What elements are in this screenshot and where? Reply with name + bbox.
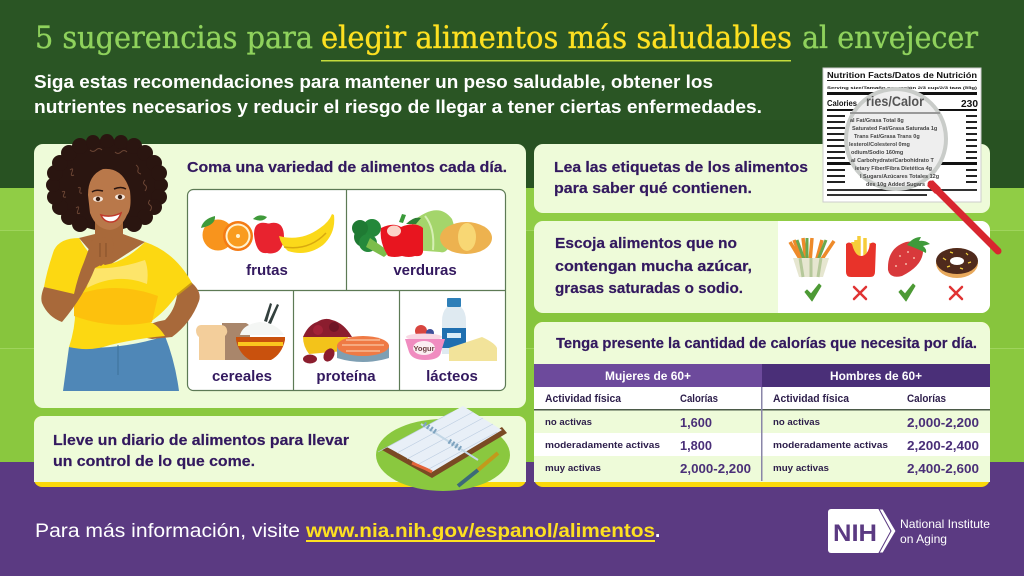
footer text: . bbox=[655, 521, 660, 542]
nutrition label: 230 bbox=[961, 99, 978, 110]
panel: food diary bbox=[34, 406, 526, 491]
panel: choose foods bbox=[534, 221, 990, 313]
magnifier lens: Saturated Fat/Grasa Saturada 1g bbox=[852, 126, 937, 132]
table body: Actividad física bbox=[773, 393, 850, 405]
table body: no activas bbox=[545, 417, 592, 428]
diary text: un control de lo que come. bbox=[53, 453, 255, 470]
icon: vegetables bbox=[352, 210, 492, 257]
right arm bbox=[138, 283, 200, 339]
magnifier lens: des 10g Added Sugars bbox=[866, 182, 925, 188]
label: cereales: cereales bbox=[212, 368, 272, 385]
table body: 2,000-2,200 bbox=[907, 416, 979, 430]
table body bbox=[534, 387, 990, 481]
food grid bbox=[188, 190, 506, 390]
icon: cross bbox=[854, 287, 866, 299]
magnifier lens: Trans Fat/Grasa Trans 0g bbox=[854, 134, 920, 140]
icon: fries bbox=[846, 236, 876, 277]
title bbox=[35, 20, 978, 62]
logo: NIH National Institute on Aging: on Aging bbox=[900, 532, 947, 546]
table body: 2,400-2,600 bbox=[907, 462, 979, 476]
table header: Mujeres de 60+ bbox=[605, 369, 691, 383]
illustration: woman bbox=[41, 134, 200, 391]
table body: 2,000-2,200 bbox=[680, 462, 751, 476]
magnifier lens: al Carbohydrate/Carbohidrato T bbox=[851, 158, 934, 164]
choose text: Escoja alimentos que no bbox=[555, 235, 737, 252]
icon: notebook and pen bbox=[376, 406, 510, 491]
label: verduras: verduras bbox=[393, 262, 457, 279]
panel: read labels bbox=[534, 144, 990, 213]
diary text bbox=[53, 432, 349, 470]
heading: calories: Tenga presente la cantidad de calorías que necesita por día. bbox=[556, 335, 977, 352]
left arm bbox=[41, 240, 114, 322]
intro text bbox=[34, 71, 762, 117]
labels text: Lea las etiquetas de los alimentos bbox=[554, 159, 808, 176]
title: 5 sugerencias para bbox=[35, 20, 313, 56]
table body: Calorías bbox=[907, 393, 946, 405]
icon: check bbox=[805, 284, 821, 301]
table body: no activas bbox=[773, 417, 820, 428]
panel: variety of foods bbox=[34, 134, 526, 408]
intro text: nutrientes necesarios y reducir el riesgo de llegar a tener ciertas enfermedades. bbox=[34, 96, 762, 117]
logo: NIH National Institute on Aging: NIH bbox=[833, 520, 877, 547]
magnifier lens: ries/Calor bbox=[866, 93, 924, 109]
logo: NIH National Institute on Aging: National Institute bbox=[900, 517, 990, 531]
nutrition label: Nutrition Facts/Datos de Nutrición bbox=[827, 70, 977, 80]
logo: NIH National Institute on Aging bbox=[828, 509, 990, 553]
face bbox=[88, 169, 131, 230]
intro text: Siga estas recomendaciones para mantener un peso saludable, obtener los bbox=[34, 71, 713, 92]
icon: grains bbox=[196, 303, 285, 360]
table body: 1,600 bbox=[680, 416, 712, 430]
nutrition label: Calories bbox=[827, 99, 858, 108]
table body: 2,200-2,400 bbox=[907, 439, 979, 453]
handle collar bbox=[930, 183, 938, 191]
labels text: para saber qué contienen. bbox=[554, 180, 752, 197]
jeans bbox=[63, 336, 179, 391]
table body: Calorías bbox=[680, 393, 718, 405]
icon: protein bbox=[303, 319, 389, 364]
shirt bbox=[44, 238, 192, 349]
title: elegir alimentos más saludables bbox=[321, 20, 792, 56]
table header bbox=[534, 364, 990, 387]
diary text: Lleve un diario de alimentos para llevar bbox=[53, 432, 349, 449]
icon: strawberry bbox=[888, 237, 930, 277]
magnifier lens: al Fat/Grasa Total 8g bbox=[850, 118, 904, 124]
labels text bbox=[554, 159, 808, 197]
icon: donut bbox=[936, 248, 978, 278]
icon: dairy: Yogur bbox=[413, 344, 435, 353]
table body: muy activas bbox=[773, 463, 829, 474]
table body: moderadamente activas bbox=[773, 440, 888, 451]
title: al envejecer bbox=[802, 20, 978, 56]
label: frutas: frutas bbox=[246, 262, 288, 279]
neck and chest bbox=[79, 222, 145, 268]
footer text bbox=[35, 521, 660, 542]
label: proteína: proteína bbox=[316, 368, 376, 385]
nutrition label: Serving size/Tamaño por ración 2/3 cup/2/3 taza (55g) bbox=[827, 85, 978, 90]
table body: muy activas bbox=[545, 463, 601, 474]
magnifier lens bbox=[846, 89, 946, 189]
label: lácteos: lácteos bbox=[426, 368, 478, 385]
choose text: grasas saturadas o sodio. bbox=[555, 280, 743, 297]
icon: fruits bbox=[201, 214, 334, 254]
hair curls bbox=[62, 148, 152, 214]
table body: 1,800 bbox=[680, 439, 712, 453]
magnifier lens: lesterol/Colesterol 0mg bbox=[849, 142, 910, 148]
magnifier lens: l Sugars/Azúcares Totales 12g bbox=[860, 174, 939, 180]
magnifier handle bbox=[931, 184, 998, 251]
table body: moderadamente activas bbox=[545, 440, 660, 451]
icon: vegetable sticks bbox=[790, 238, 834, 277]
nutrition label bbox=[823, 68, 981, 202]
magnifier lens: odium/Sodio 160mg bbox=[851, 150, 903, 156]
hair bbox=[46, 134, 168, 232]
icon: cross bbox=[950, 287, 962, 299]
nutrition label with magnifying glass bbox=[823, 68, 998, 251]
choose text: contengan mucha azúcar, bbox=[555, 258, 752, 275]
heading: variety: Coma una variedad de alimentos cada día. bbox=[187, 159, 507, 176]
panel: calories bbox=[534, 322, 990, 487]
icon: check bbox=[899, 284, 915, 301]
icon: dairy bbox=[405, 298, 497, 361]
footer text: www.nia.nih.gov/espanol/alimentos bbox=[305, 521, 655, 542]
footer text: Para más información, visite bbox=[35, 521, 300, 542]
magnifier lens: ietary Fiber/Fibra Dietética 4g bbox=[855, 166, 932, 172]
table body: Actividad física bbox=[545, 393, 622, 405]
hand on chin bbox=[89, 238, 113, 266]
choose text bbox=[555, 235, 752, 297]
table header: Hombres de 60+ bbox=[830, 369, 922, 383]
